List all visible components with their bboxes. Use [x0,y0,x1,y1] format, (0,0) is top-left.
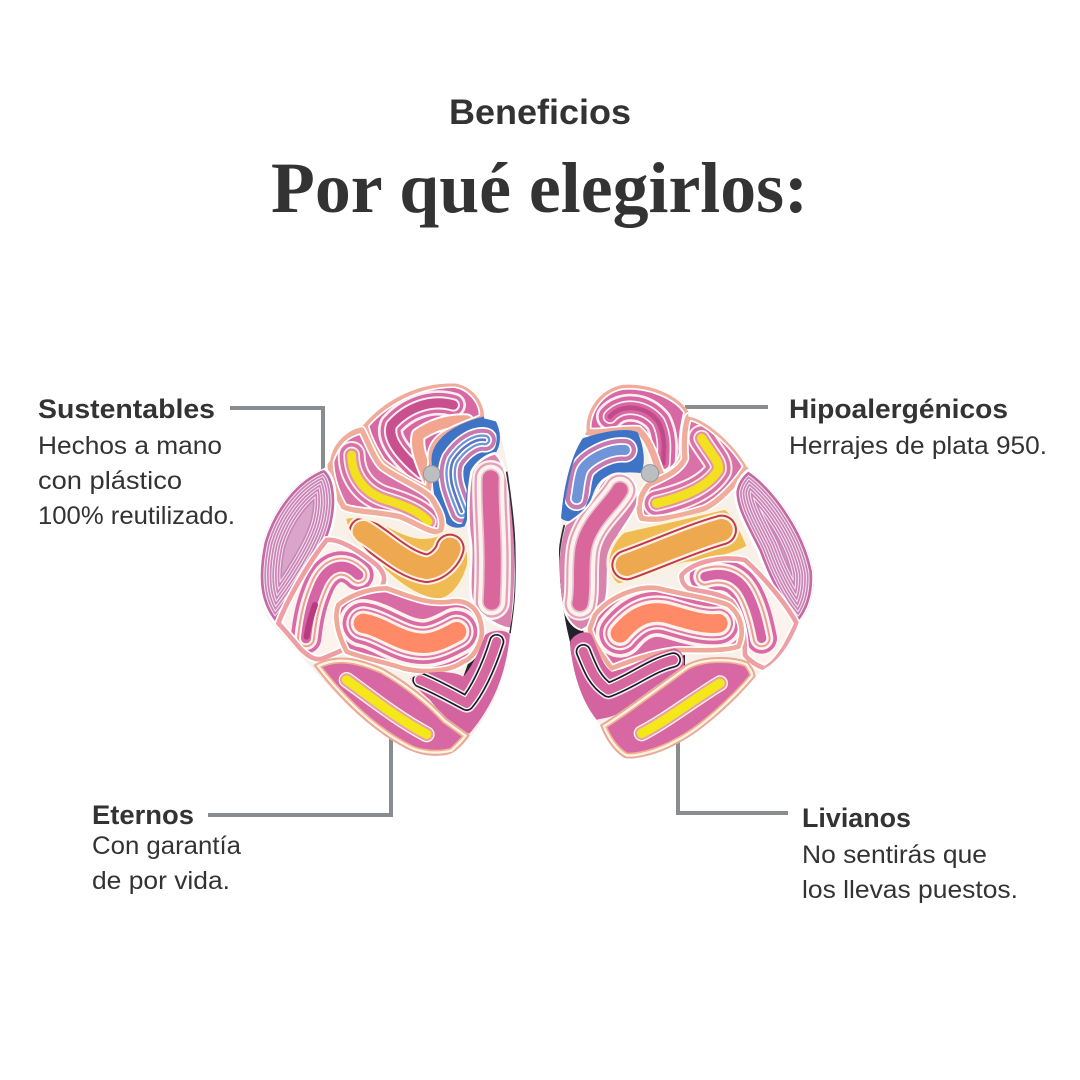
lobe: yellow lower [313,658,470,756]
callout: Livianos: No sentirás que [802,841,987,869]
lobe: yellow upper [330,430,442,532]
callout: Eternos: Con garantía [92,832,241,860]
callout: Livianos [802,803,1018,904]
subtitle: Beneficios: Beneficios [449,93,631,132]
callout: Sustentables [38,394,235,530]
dark gap [463,657,476,677]
earring left [258,384,516,756]
callout: Sustentables: 100% reutilizado. [38,502,235,530]
callout: Hipoalergénicos: Hipoalergénicos [789,394,1008,424]
lobe: blue [562,431,642,520]
callout: Eternos: Eternos [92,800,194,830]
lobe: coral [590,588,742,668]
lobe: lower-left pink [278,540,384,659]
dark gaps [560,578,685,686]
leader line: Eternos [208,738,391,815]
callout: Eternos [92,800,241,895]
callout: Hipoalergénicos: Herrajes de plata 950. [789,432,1047,460]
lobe: orange [606,507,750,587]
earring right base [560,436,766,744]
edge shadow [558,525,570,642]
lobe: top pink [365,384,483,490]
lobe: lilac spiral [735,470,814,623]
leader line: Sustentables [230,408,323,470]
lobe: yellow lower [600,657,756,759]
silver post [641,465,659,482]
silver post [423,466,440,482]
callout: Eternos: de por vida. [92,867,230,895]
earring right [558,385,814,759]
earring left base [258,422,512,756]
callout: Sustentables: Hechos a mano [38,432,222,460]
leader line: Livianos [678,740,788,813]
callout: Livianos: Livianos [802,803,911,833]
title: Por qué elegirlos: Por qué elegirlos: [271,148,808,228]
lobe: S-shaped pink [558,473,637,630]
edge shadow [507,472,516,633]
lobe: top pink [587,385,688,477]
lobe: orange [343,515,470,602]
callout: Sustentables: Sustentables [38,394,215,424]
lobe: right vertical pink [468,453,516,629]
callout: Hipoalergénicos [789,394,1047,460]
leader line: Hipoalergénicos [685,405,768,409]
callout: Sustentables: con plástico [38,467,182,495]
lobe: lilac spiral [259,468,336,623]
lobe: pink V with black line [570,632,684,720]
callout: Livianos: los llevas puestos. [802,876,1018,904]
lobe: blue [433,418,498,526]
lobe: lower-right pink [682,559,797,668]
lobe: pink V with black line [410,631,510,733]
lobe: yellow upper [639,417,747,519]
lobe: coral [336,588,482,671]
